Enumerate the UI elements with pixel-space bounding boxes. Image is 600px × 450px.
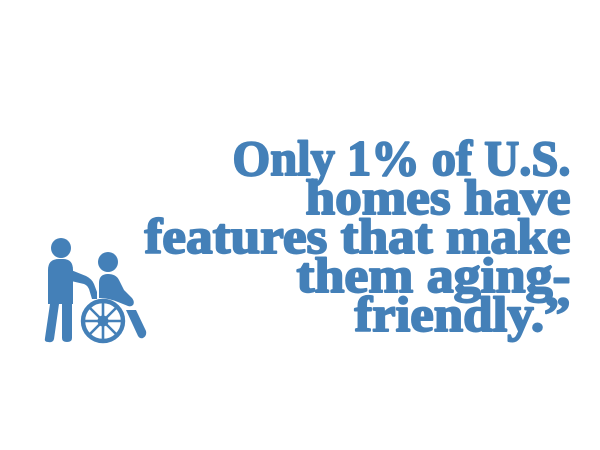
icon: caregiver: [45, 238, 97, 342]
quote text: homes have: [306, 169, 570, 225]
quote text: them aging-: [296, 247, 570, 303]
quote text: friendly.”: [354, 286, 570, 342]
icon: wheelchair user: [83, 252, 146, 341]
wheel: [83, 301, 123, 341]
icon: caregiver pushing wheelchair: [45, 238, 146, 342]
quote text: [144, 130, 570, 342]
quote text: Only 1% of U.S.: [232, 130, 570, 186]
quote text: features that make: [144, 208, 570, 264]
